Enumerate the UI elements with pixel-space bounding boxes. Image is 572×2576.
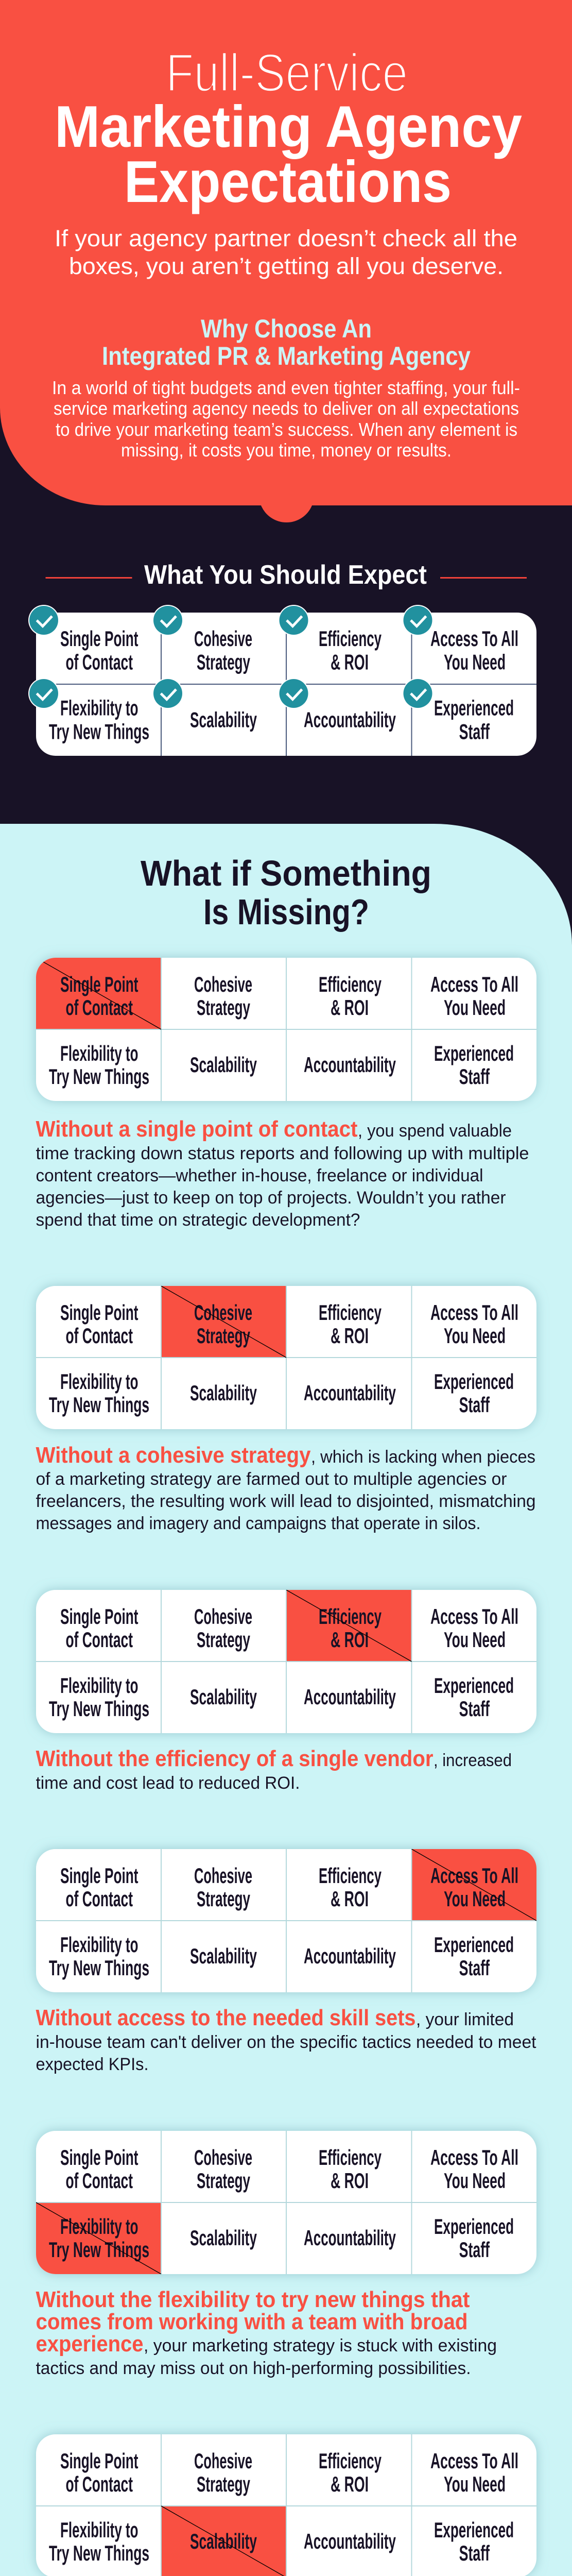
panel: checklist of expectations: Try New Things	[49, 719, 149, 744]
panel: flexibility missing: of Contact	[66, 2168, 133, 2193]
text: without cohesive strategy: , which is lacking when pieces	[311, 1447, 535, 1467]
text: without flexibility to try new things: tactics and may miss out on high-performing possibilities.	[36, 2359, 471, 2378]
panel: single point of contact missing: You Need	[444, 995, 506, 1020]
panel: single point of contact missing: Scalability	[190, 1053, 257, 1077]
panel: efficiency and ROI missing: of Contact	[66, 1628, 133, 1652]
panel: scalability missing: Staff	[459, 2541, 490, 2565]
panel: checklist of expectations: You Need	[444, 650, 506, 674]
panel: efficiency and ROI missing: Scalability	[190, 1685, 257, 1709]
heading: what you should expect: What You Should Expect	[144, 560, 427, 590]
text: without cohesive strategy: Without a cohesive strategy	[36, 1443, 311, 1468]
panel: flexibility missing: Try New Things	[49, 2238, 149, 2262]
icons: teal check badges	[28, 605, 434, 709]
panel: cohesive strategy missing: Staff	[459, 1393, 490, 1417]
subtitle: boxes, you aren’t getting all you deserve.	[69, 253, 504, 279]
text: without efficiency of single vendor	[36, 1746, 512, 1793]
panel: cohesive strategy missing: Accountability	[304, 1381, 396, 1405]
panel: flexibility missing: Efficiency	[319, 2145, 382, 2170]
panel: cohesive strategy missing: Single Point	[60, 1300, 138, 1325]
panel: scalability missing: Access To All	[430, 2449, 518, 2473]
panel: checklist of expectations	[28, 605, 536, 756]
panel: checklist of expectations: Cohesive	[194, 626, 252, 651]
panel: flexibility missing: You Need	[444, 2168, 506, 2193]
panel: efficiency and ROI missing: & ROI	[331, 1628, 369, 1652]
heading: why choose an integrated agency: Why Choose An	[201, 314, 372, 343]
panel: access to all you need missing: Cohesive	[194, 1863, 252, 1888]
text: without access to needed skill sets: Without access to the needed skill sets	[36, 2005, 416, 2030]
heading: what if something is missing	[141, 853, 431, 932]
panel: scalability missing: Try New Things	[49, 2541, 149, 2565]
heading: what if something is missing: Is Missing?	[203, 892, 369, 932]
panel: flexibility missing: Strategy	[197, 2168, 250, 2193]
panel: cohesive strategy missing: You Need	[444, 1324, 506, 1348]
panel: efficiency and ROI missing	[36, 1590, 536, 1733]
panel: scalability missing: of Contact	[66, 2472, 133, 2496]
panel: efficiency and ROI missing: You Need	[444, 1628, 506, 1652]
text: without access to needed skill sets	[36, 2005, 536, 2074]
panel: flexibility missing: Cohesive	[194, 2145, 252, 2170]
panel: access to all you need missing: Accountability	[304, 1944, 396, 1968]
panel: red header	[0, 0, 572, 522]
panel: access to all you need missing: You Need	[444, 1887, 506, 1911]
panel: scalability missing: Experienced	[434, 2518, 514, 2542]
title	[55, 43, 522, 215]
panel: efficiency and ROI missing: Staff	[459, 1697, 490, 1721]
panel: cohesive strategy missing: Cohesive	[194, 1300, 252, 1325]
panel: efficiency and ROI missing: Strategy	[197, 1628, 250, 1652]
panel: single point of contact missing: Efficiency	[319, 972, 382, 996]
panel: access to all you need missing: Single Point	[60, 1863, 138, 1888]
text: without efficiency of single vendor: Without the efficiency of a single vendor	[36, 1746, 434, 1771]
intro paragraph: In a world of tight budgets and even tighter staffing, your full-	[52, 377, 520, 398]
text: without access to needed skill sets: in-house team can't deliver on the specific tactics needed to meet	[36, 2032, 536, 2052]
panel: scalability missing: Single Point	[60, 2449, 138, 2473]
panel: checklist of expectations: & ROI	[331, 650, 369, 674]
text: without cohesive strategy	[36, 1443, 535, 1533]
panel: access to all you need missing: of Contact	[66, 1887, 133, 1911]
panel: single point of contact missing: Try New Things	[49, 1064, 149, 1089]
panel: efficiency and ROI missing: Efficiency	[319, 1604, 382, 1629]
panel: access to all you need missing: Experienced	[434, 1933, 514, 1957]
panel: access to all you need missing	[36, 1849, 536, 1992]
panel: cohesive strategy missing: Scalability	[190, 1381, 257, 1405]
panel: scalability missing: Strategy	[197, 2472, 250, 2496]
panel: checklist of expectations: Experienced	[434, 696, 514, 720]
heading: what you should expect	[45, 560, 527, 590]
panel: single point of contact missing: & ROI	[331, 995, 369, 1020]
panel: checklist of expectations: Access To All	[430, 626, 518, 651]
text: without cohesive strategy: messages and imagery and campaigns that operate in silos.	[36, 1514, 481, 1533]
panel: efficiency and ROI missing: Experienced	[434, 1673, 514, 1698]
panel: efficiency and ROI missing: Try New Things	[49, 1697, 149, 1721]
subtitle: If your agency partner doesn’t check all the	[55, 225, 517, 251]
panel: cohesive strategy missing: Flexibility to	[60, 1369, 138, 1394]
panel: scalability missing: & ROI	[331, 2472, 369, 2496]
panel: single point of contact missing: Flexibility to	[60, 1041, 138, 1065]
panel: cohesive strategy missing: Try New Things	[49, 1393, 149, 1417]
panel: access to all you need missing: Scalability	[190, 1944, 257, 1968]
panel: checklist of expectations: Scalability	[190, 708, 257, 732]
title: Full-Service	[166, 43, 408, 103]
panel: single point of contact missing: of Contact	[66, 995, 133, 1020]
panel: scalability missing: Flexibility to	[60, 2518, 138, 2542]
panel: flexibility missing: Single Point	[60, 2145, 138, 2170]
panel: single point of contact missing: Accountability	[304, 1053, 396, 1077]
panel: single point of contact missing: Single Point	[60, 972, 138, 996]
panel: flexibility missing: Access To All	[430, 2145, 518, 2170]
text: without cohesive strategy: of a marketing strategy are farmed out to multiple agencies or	[36, 1469, 507, 1489]
panel: single point of contact missing	[36, 958, 536, 1101]
panel: cohesive strategy missing: Access To All	[430, 1300, 518, 1325]
panel: flexibility missing: Experienced	[434, 2214, 514, 2239]
panel: checklist of expectations: Flexibility to	[60, 696, 138, 720]
title: Expectations	[124, 149, 452, 215]
panel: checklist of expectations: Efficiency	[319, 626, 382, 651]
text: without cohesive strategy: freelancers, the resulting work will lead to disjointed, mismatching	[36, 1492, 535, 1511]
panel: efficiency and ROI missing: Accountability	[304, 1685, 396, 1709]
text: without single point of contact: spend that time on strategic development?	[36, 1210, 360, 1230]
heading: why choose an integrated agency	[102, 314, 471, 370]
panel: scalability missing: Scalability	[190, 2529, 257, 2553]
panel: single point of contact missing: Staff	[459, 1064, 490, 1089]
intro paragraph: to drive your marketing team’s success. When any element is	[56, 419, 517, 440]
text: without efficiency of single vendor: time and cost lead to reduced ROI.	[36, 1773, 300, 1793]
text: without single point of contact	[36, 1116, 529, 1230]
panel: flexibility missing: Flexibility to	[60, 2214, 138, 2239]
text: without efficiency of single vendor: , increased	[434, 1751, 512, 1770]
panel: access to all you need missing: Flexibility to	[60, 1933, 138, 1957]
panel: access to all you need missing: Strategy	[197, 1887, 250, 1911]
panel: flexibility missing	[36, 2131, 536, 2274]
panel: access to all you need missing: Efficiency	[319, 1863, 382, 1888]
panel: efficiency and ROI missing: Cohesive	[194, 1604, 252, 1629]
text: without flexibility to try new things: , your marketing strategy is stuck with existing	[144, 2336, 497, 2355]
panel: single point of contact missing: Strategy	[197, 995, 250, 1020]
panel: access to all you need missing: & ROI	[331, 1887, 369, 1911]
panel: scalability missing: Efficiency	[319, 2449, 382, 2473]
panel: cohesive strategy missing: Efficiency	[319, 1300, 382, 1325]
intro paragraph	[52, 377, 520, 461]
panel: scalability missing: You Need	[444, 2472, 506, 2496]
text: without access to needed skill sets: , your limited	[416, 2010, 514, 2029]
panel: flexibility missing: Staff	[459, 2238, 490, 2262]
panel: checklist of expectations: Single Point	[60, 626, 138, 651]
text: without flexibility to try new things: experience	[36, 2331, 143, 2357]
panel: cohesive strategy missing: Strategy	[197, 1324, 250, 1348]
text: without flexibility to try new things: comes from working with a team with broad	[36, 2309, 467, 2334]
text: without flexibility to try new things: Without the flexibility to try new things that	[36, 2287, 470, 2312]
intro paragraph: service marketing agency needs to deliver on all expectations	[54, 398, 519, 419]
subtitle	[55, 225, 517, 279]
panel: flexibility missing: Scalability	[190, 2226, 257, 2250]
panel: cohesive strategy missing: Experienced	[434, 1369, 514, 1394]
panel: single point of contact missing: Access To All	[430, 972, 518, 996]
panel: efficiency and ROI missing: Flexibility to	[60, 1673, 138, 1698]
panel: flexibility missing: & ROI	[331, 2168, 369, 2193]
panel: access to all you need missing: Try New Things	[49, 1956, 149, 1980]
panel: checklist of expectations: Accountability	[304, 708, 396, 732]
panel: cohesive strategy missing: of Contact	[66, 1324, 133, 1348]
panel: efficiency and ROI missing: Single Point	[60, 1604, 138, 1629]
panel: single point of contact missing: Cohesive	[194, 972, 252, 996]
panel: flexibility missing: Accountability	[304, 2226, 396, 2250]
panel: cyan missing section background	[0, 824, 572, 2576]
panel: checklist of expectations: of Contact	[66, 650, 133, 674]
text: without single point of contact: agencies—just to keep on top of projects. Wouldn’t you rather	[36, 1188, 506, 1208]
panel: scalability missing: Accountability	[304, 2529, 396, 2553]
heading: why choose an integrated agency: Integrated PR & Marketing Agency	[102, 342, 471, 370]
panel: cohesive strategy missing	[36, 1286, 536, 1429]
panel: scalability missing	[36, 2434, 536, 2576]
text: without single point of contact: time tracking down status reports and following up with multiple	[36, 1144, 529, 1163]
text: without single point of contact: content creators—whether in-house, freelance or individual	[36, 1166, 483, 1185]
panel: cohesive strategy missing: & ROI	[331, 1324, 369, 1348]
intro paragraph: missing, it costs you time, money or results.	[121, 439, 452, 461]
panel: scalability missing: Cohesive	[194, 2449, 252, 2473]
title: Marketing Agency	[55, 94, 522, 160]
panel: efficiency and ROI missing: Access To All	[430, 1604, 518, 1629]
panel: single point of contact missing: Experienced	[434, 1041, 514, 1065]
text: without flexibility to try new things	[36, 2287, 497, 2378]
panel: access to all you need missing: Access To All	[430, 1863, 518, 1888]
panel: checklist of expectations: Staff	[459, 719, 490, 744]
panel: checklist of expectations: Strategy	[197, 650, 250, 674]
text: without access to needed skill sets: expected KPIs.	[36, 2055, 148, 2074]
text: without single point of contact: , you spend valuable	[358, 1121, 512, 1141]
text: without single point of contact: Without a single point of contact	[36, 1116, 358, 1142]
heading: what if something is missing: What if Something	[141, 853, 431, 893]
panel: access to all you need missing: Staff	[459, 1956, 490, 1980]
